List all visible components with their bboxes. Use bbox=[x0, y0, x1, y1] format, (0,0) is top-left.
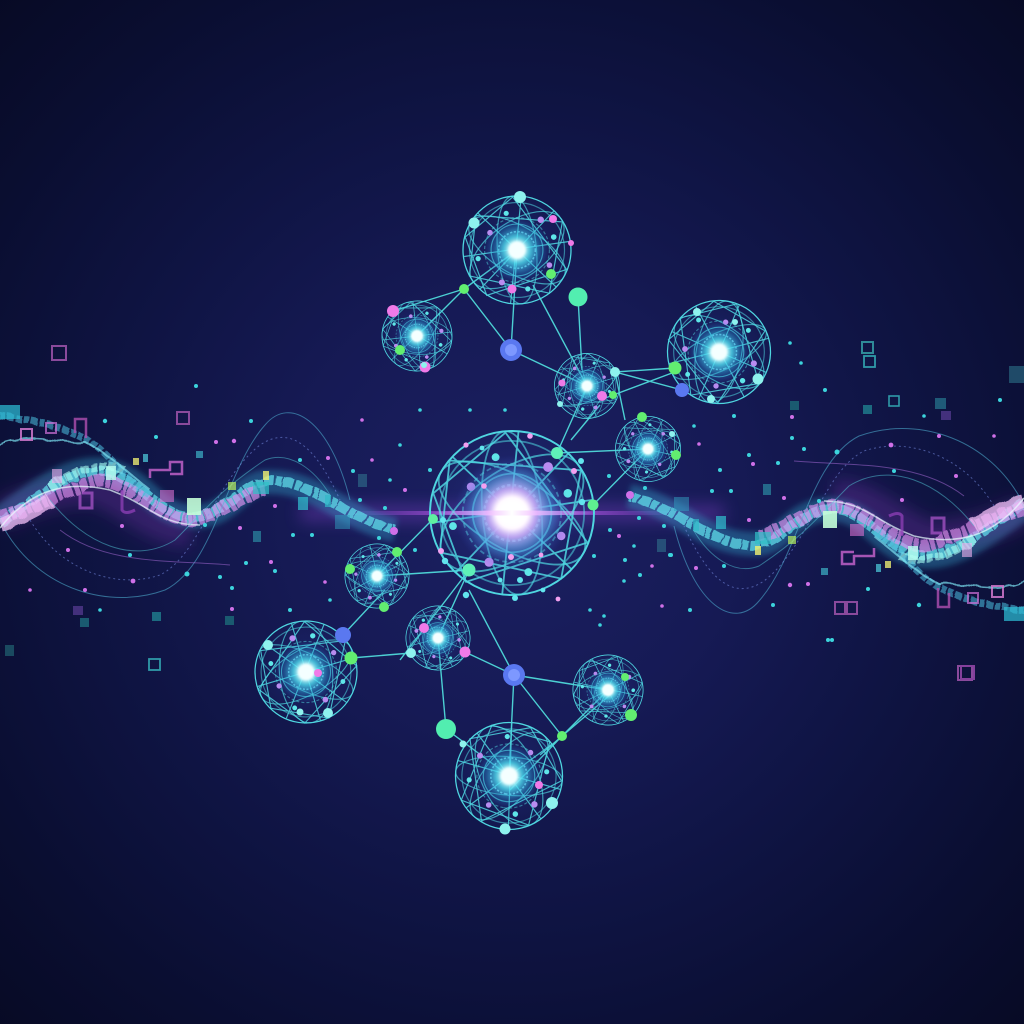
link nodes bbox=[263, 191, 764, 834]
hub: bottom bbox=[444, 708, 574, 844]
left data wave bbox=[0, 346, 432, 670]
central flare bbox=[427, 497, 597, 529]
hub: middle lower bbox=[395, 593, 481, 683]
hub: central bbox=[420, 429, 604, 597]
hub: middle right bbox=[602, 405, 694, 493]
horizontal light streak bbox=[300, 505, 724, 521]
hub: lower left bbox=[232, 596, 380, 748]
hub: upper left bbox=[364, 283, 470, 389]
hub: middle upper bbox=[540, 338, 634, 434]
hub: middle left bbox=[332, 533, 422, 619]
hub: upper right bbox=[650, 280, 788, 424]
network links bbox=[343, 250, 682, 790]
hub: top bbox=[457, 195, 577, 305]
stray squares right bbox=[845, 342, 1024, 679]
hub: lower right bbox=[559, 643, 657, 737]
scattered particles around hub bbox=[468, 341, 1002, 642]
central core glow bbox=[454, 455, 570, 571]
right data wave bbox=[592, 356, 1024, 680]
central hub nodes bbox=[428, 433, 598, 601]
